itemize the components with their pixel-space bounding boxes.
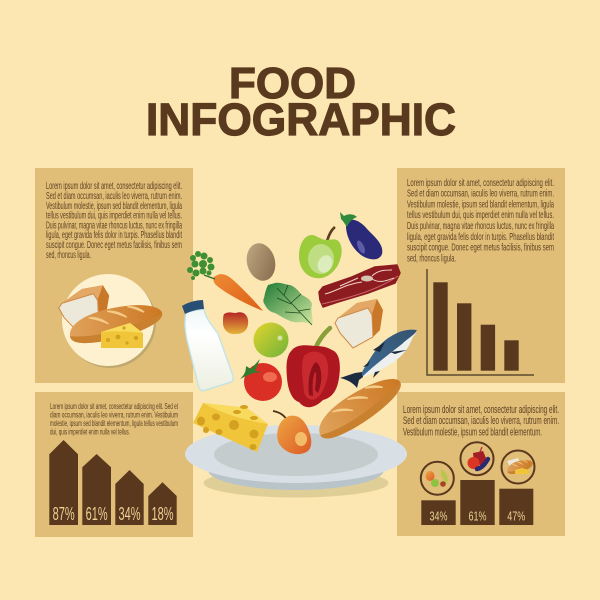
arrow bar: 18% [148,482,177,525]
panel: bottom left text and percentages [35,392,193,537]
text block: top left: Lorem ipsum dolor sit amet, consectetur adipiscing elit. [46,181,182,192]
bar: fruits 34% [421,500,456,525]
bar: vegetables 61% [460,480,495,525]
text block: bottom left [50,401,178,437]
bar: fruits 34%: 34% [430,510,448,524]
text block: top left: sed, rhoncus ligula. [46,250,91,261]
bar chart [427,269,534,375]
icon: vegetables circle [460,442,494,475]
bar: bakery 47% [499,489,533,525]
text block: top left: Duis pulvinar, magna vitae rhoncus luctus, nunc ex fringilla [46,220,182,232]
icon: bakery plate [59,274,164,368]
arrow bar: 87% [49,440,78,525]
icon: bakery circle [502,450,534,484]
panel: bottom right text and food bars [397,392,565,536]
text block: top left: Sed et diam occumsan, iaculis leo viverra, rutrum enim. [46,191,182,202]
icon: carrot [187,251,263,311]
icon: tomato [240,359,282,401]
text block: bottom left: Lorem ipsum dolor sit amet, consectetur adipiscing elit. Sed et [50,401,178,411]
arrow bar: 34% [115,470,144,525]
icon: lettuce [263,283,313,325]
text block: top left: suscipit congue. Donec eget metus facilisis, finibus sem [46,240,182,251]
panel: top left text and bakery plate [35,168,193,383]
icon: fruits circle [421,462,454,495]
text block: top left: ligula, eget gravida felis dolor in turpis. Phasellus blandit [46,230,182,241]
illustration: falling foods onto plate [182,212,417,498]
icon: red pepper [287,328,340,407]
plate [185,425,407,498]
icon: potato [243,240,279,284]
text block: top right: sed, rhoncus ligula. [407,252,456,264]
arrow bar: 61%: 61% [86,504,108,524]
bar: vegetables 61%: 61% [468,510,486,524]
title: INFOGRAPHIC [146,94,456,145]
icon: small red apple [223,312,248,334]
panel: top right text and bar chart [397,168,565,383]
icon: fish [340,330,417,388]
arrow bar: 34%: 34% [118,504,140,524]
icon: milk bottle [182,300,233,391]
arrow bar: 61% [82,454,111,525]
text block: bottom left: molestie, ipsum sed blandit elementum, ligula tellus vestibulum [50,418,178,428]
text block: bottom left: diam occumsan, iaculis leo viverra, rutrum enim. Vestibulum [50,410,178,420]
arrow bar: 87%: 87% [53,504,75,524]
icon: peach [273,411,311,454]
text block: top left [46,181,182,261]
title: FOOD [229,59,356,108]
text block: bottom right [403,404,559,438]
text block: top left: tellus vestibulum dui, quis imperdiet enim nulla vel tellus. [46,210,182,222]
icon: lime [254,322,288,358]
icon: baguette [310,372,410,443]
icon: bread slice [335,299,383,348]
icon: green apple [299,227,342,278]
arrow bar: 18%: 18% [152,504,174,524]
title [146,59,456,145]
text block: bottom left: dui, quis imperdiet enim nulla vel tellus. [50,427,130,437]
icon: eggplant [340,212,382,259]
bar: bakery 47%: 47% [507,510,525,524]
text block: top right [407,177,554,264]
text block: top left: Vestibulum molestie, ipsum sed blandit elementum, ligula [46,201,182,212]
icon: raw meat [319,265,400,307]
icon: cheese wedge [193,403,268,452]
